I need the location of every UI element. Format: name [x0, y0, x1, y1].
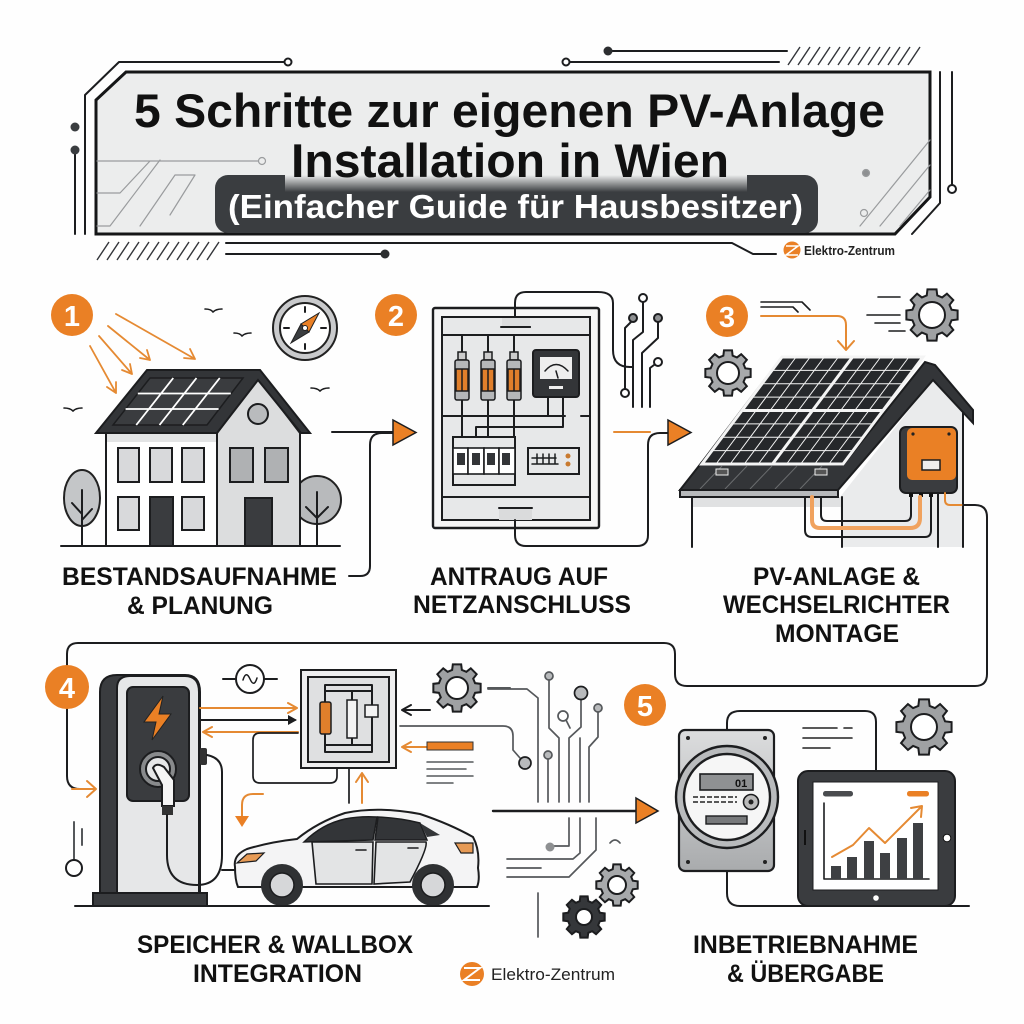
logo: footer: Elektro-Zentrum — [491, 966, 615, 984]
label 5: INBETRIEBNAHME — [693, 931, 918, 959]
subtitle: (Einfacher Guide für Hausbesitzer) — [228, 188, 803, 225]
illustration: switch cabinet — [433, 308, 599, 528]
left sensor — [66, 822, 82, 876]
icon: compass — [273, 296, 337, 360]
inverter cables — [805, 497, 931, 537]
label 3: PV-ANLAGE & — [753, 563, 920, 591]
label 2: NETZANSCHLUSS — [413, 591, 631, 619]
badge 1: 1 — [64, 301, 80, 333]
label 1 — [62, 563, 337, 620]
icon: gear left — [705, 350, 751, 396]
step 2: grid connection — [375, 292, 691, 619]
document outline and lines — [727, 711, 969, 906]
step 1: survey and planning — [51, 294, 416, 620]
badge 4: 4 — [59, 673, 75, 705]
label 1: & PLANUNG — [127, 592, 273, 620]
badge 1 — [51, 294, 93, 336]
subtitle pill — [215, 175, 818, 233]
icon: gear top right — [867, 289, 958, 341]
label 5 — [693, 931, 918, 988]
illustration: charging station — [93, 675, 235, 906]
title line 2: Installation in Wien — [291, 134, 729, 187]
badge 3: 3 — [719, 302, 735, 334]
badge 4 — [45, 665, 89, 709]
step 5: commissioning — [624, 684, 969, 988]
logo: footer — [460, 962, 615, 986]
icon: gear — [433, 664, 510, 712]
top wire and circuit traces — [515, 292, 662, 407]
arrow onto panels — [761, 302, 854, 350]
connector arrow 2 to 3 — [515, 420, 691, 546]
label 4 — [137, 931, 413, 988]
illustration: house with solar roof — [61, 370, 341, 546]
flow arrows — [200, 703, 430, 827]
badge 2: 2 — [388, 301, 404, 333]
label 4: INTEGRATION — [193, 960, 362, 988]
step 4: storage and wallbox — [45, 664, 510, 988]
label 5: & ÜBERGABE — [727, 959, 884, 988]
orange module and text lines — [427, 742, 473, 783]
badge 3 — [706, 295, 748, 337]
label 2 — [413, 563, 631, 619]
birds — [64, 309, 329, 411]
logo: header: Elektro-Zentrum — [804, 244, 895, 258]
label 2: ANTRAUG AUF — [430, 563, 608, 591]
icon: gear pair — [563, 864, 638, 938]
illustration: electricity meter — [676, 730, 778, 871]
label 3 — [723, 563, 950, 648]
distribution box — [301, 670, 396, 768]
inverter — [900, 427, 957, 497]
badge 2 — [375, 294, 417, 336]
connector loop to step 4 — [67, 493, 987, 797]
circuit traces and arrow 4 to 5 — [400, 672, 658, 937]
illustration: electric car — [75, 810, 489, 906]
icon: gear — [896, 699, 952, 755]
connector arrow 1 to 2 — [332, 420, 416, 576]
badge 5: 5 — [637, 691, 653, 723]
icon: AC symbol — [223, 665, 277, 693]
step 3: PV and inverter installation — [67, 289, 987, 797]
illustration: tablet with chart — [798, 771, 955, 906]
illustration: roof with solar panels — [680, 357, 973, 547]
label 4: SPEICHER & WALLBOX — [137, 931, 413, 959]
badge 5 — [624, 684, 666, 726]
illustration: electricity meter: 01 — [735, 778, 747, 790]
logo: header — [784, 242, 895, 258]
label 3: WECHSELRICHTER — [723, 591, 950, 619]
panel: title banner — [70, 46, 956, 260]
label 3: MONTAGE — [775, 620, 899, 648]
sun ray arrows — [90, 314, 195, 393]
label 1: BESTANDSAUFNAHME — [62, 563, 337, 591]
title line 1: 5 Schritte zur eigenen PV-Anlage — [134, 84, 885, 137]
